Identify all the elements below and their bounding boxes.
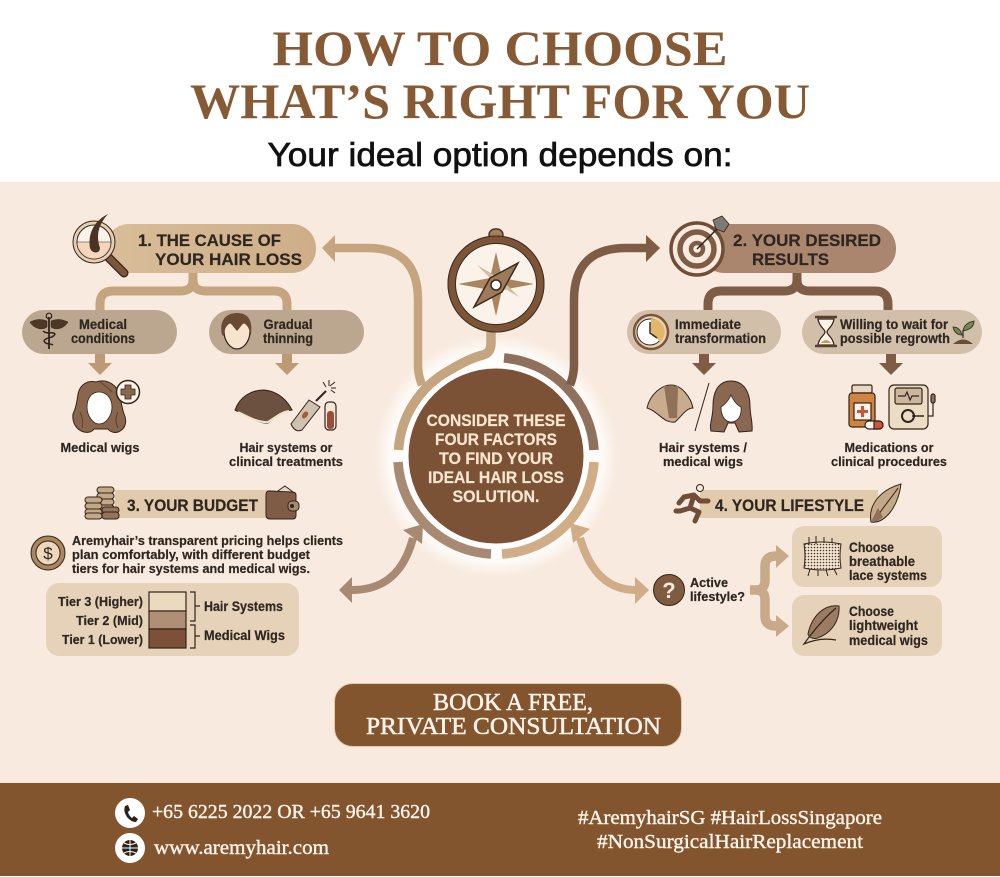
sub pill: gradual thinning: [209, 310, 364, 354]
label: [849, 604, 928, 648]
sub pill: immediate: [627, 310, 781, 354]
sub pill: medical conditions: [22, 310, 177, 354]
label: breathable: [849, 554, 915, 569]
heading pill: [700, 490, 878, 518]
heading pill: [105, 224, 316, 273]
hashtags: [578, 807, 882, 853]
icon: coins: [85, 487, 119, 519]
icon: caduceus: [30, 313, 68, 349]
icon: dollar coin: $: [43, 544, 53, 563]
label: [690, 575, 745, 604]
title: WHAT’S RIGHT FOR YOU: [190, 73, 810, 129]
label: [675, 317, 766, 346]
panel: factor 2 results: [627, 216, 982, 469]
icon: wallet: [266, 486, 299, 519]
label: medical wigs: [663, 454, 743, 469]
hub text: [426, 412, 566, 506]
panel: factor 4 lifestyle: [654, 484, 942, 656]
arrow to factor 1: [322, 235, 422, 385]
panel: factor 3 budget: [31, 486, 343, 656]
footer: [0, 783, 1000, 876]
box: lightweight wigs: [792, 595, 942, 656]
arrow: [275, 354, 299, 375]
icon: hair system and tools: [235, 380, 336, 431]
label: Medical: [79, 317, 127, 332]
hub text: SOLUTION.: [452, 488, 540, 506]
icon: target: [671, 216, 729, 275]
heading pill: [115, 490, 275, 518]
icon: hourglass: [815, 317, 837, 346]
label: [659, 440, 747, 469]
arrow: [88, 354, 112, 375]
icon: magnifier: [73, 214, 124, 273]
heading: 1. THE CAUSE OF: [138, 231, 281, 250]
icon: clock: [634, 315, 668, 349]
label: medical wigs: [849, 633, 928, 648]
tier labels: Tier 2 (Mid): [76, 613, 143, 628]
budget text: tiers for hair systems and medical wigs.: [72, 561, 310, 576]
label: Active: [690, 575, 728, 590]
icon: question mark: ?: [662, 578, 676, 603]
budget text: plan comfortably, with different budget: [72, 547, 311, 562]
heading pill: [700, 224, 896, 273]
label: Choose: [849, 604, 894, 619]
heading: RESULTS: [752, 250, 829, 269]
label: lightweight: [849, 618, 918, 633]
heading: 4. YOUR LIFESTYLE: [715, 497, 864, 515]
hashtags: #AremyhairSG #HairLossSingapore: [578, 807, 882, 829]
tier groups: Hair Systems: [204, 599, 283, 614]
icon: compass: [448, 229, 544, 332]
tier box: [46, 583, 299, 656]
label: Medical wigs: [60, 440, 140, 455]
hub text: TO FIND YOUR: [439, 450, 553, 468]
label: conditions: [71, 331, 135, 346]
arrow to factor 4: [570, 523, 649, 604]
background panel: [0, 182, 1000, 783]
tier groups: Medical Wigs: [204, 628, 285, 643]
website: www.aremyhair.com: [154, 837, 329, 859]
arrow to factor 3: [339, 524, 423, 603]
label: Hair systems or: [240, 440, 332, 455]
tier stacked bar: [149, 592, 186, 648]
icon: leaf: [871, 484, 901, 522]
label: transformation: [675, 331, 766, 346]
icon: feather: [804, 606, 839, 644]
hub text: CONSIDER THESE: [426, 412, 566, 430]
tier labels: Tier 1 (Lower): [62, 632, 143, 647]
box: lace systems: [792, 526, 942, 587]
sub pill: willing to wait: [802, 310, 982, 354]
label: possible regrowth: [840, 331, 950, 346]
call to action button: [334, 684, 682, 746]
heading: [733, 231, 881, 269]
connector: [708, 273, 888, 311]
heading: YOUR HAIR LOSS: [155, 250, 302, 269]
title: HOW TO CHOOSE: [272, 20, 728, 76]
heading: 2. YOUR DESIRED: [733, 231, 881, 250]
call to action button: BOOK A FREE,: [433, 690, 593, 716]
label: clinical treatments: [229, 454, 343, 469]
heading: 3. YOUR BUDGET: [127, 497, 258, 515]
icon: phone: [115, 798, 145, 828]
brackets: [190, 592, 200, 648]
label: Immediate: [675, 317, 741, 332]
icon: runner: [676, 484, 708, 521]
icon: sprout: [953, 321, 974, 344]
call to action button: PRIVATE CONSULTATION: [366, 714, 661, 740]
label: [849, 540, 927, 583]
heading: [138, 231, 302, 269]
arrow: [879, 354, 903, 375]
title: [190, 20, 810, 129]
central hub: [374, 332, 618, 578]
label: clinical procedures: [831, 454, 947, 469]
phone numbers: +65 6225 2022 OR +65 9641 3620: [152, 801, 430, 823]
icon: question mark: [654, 574, 684, 606]
tier labels: [58, 594, 143, 647]
icon: medical wig: [73, 380, 140, 432]
label: thinning: [263, 331, 313, 346]
label: Gradual: [264, 317, 312, 332]
icon: globe: [115, 833, 145, 863]
label: [831, 440, 947, 469]
icon: dollar coin: [31, 536, 65, 570]
label: lace systems: [849, 568, 927, 583]
label: Willing to wait for: [840, 317, 949, 332]
subtitle: Your ideal option depends on:: [268, 136, 732, 173]
branching arrows: [750, 545, 789, 637]
icon: hair system and wig: [647, 381, 752, 432]
label: Choose: [849, 540, 894, 555]
label: Hair systems /: [659, 440, 747, 455]
label: Medications or: [844, 440, 934, 455]
arrow: [692, 354, 716, 375]
hashtags: #NonSurgicalHairReplacement: [597, 831, 863, 853]
tier labels: Tier 3 (Higher): [58, 594, 143, 609]
icon: lace: [804, 536, 841, 576]
panel: factor 1 cause: [22, 214, 364, 469]
connector: [100, 273, 287, 311]
hub text: IDEAL HAIR LOSS: [428, 469, 564, 487]
label: [840, 317, 950, 346]
icon: balding head: [221, 313, 251, 349]
budget text: [72, 533, 343, 576]
label: [263, 317, 313, 346]
label: [71, 317, 135, 346]
tier groups: [204, 599, 285, 643]
label: [229, 440, 343, 469]
hub text: FOUR FACTORS: [435, 431, 557, 449]
label: lifestyle?: [690, 589, 745, 604]
icon: medicine bottle and machine: [849, 385, 935, 429]
arrow to factor 2: [570, 235, 660, 385]
budget text: Aremyhair’s transparent pricing helps clients: [72, 533, 343, 548]
